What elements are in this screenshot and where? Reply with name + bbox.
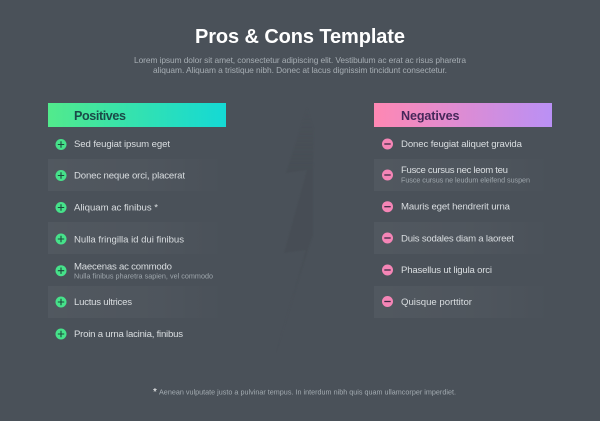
row: Fusce cursus (382, 165, 530, 184)
row: Phasellus: Phasellus ut ligula orci (401, 265, 492, 276)
row: Proin: Proin a urna lacinia, finibus (74, 329, 183, 340)
intro text: Lorem ipsum dolor sit amet, consectetur adipiscing elit. Vestibulum ac erat ac risus pharetra (134, 55, 466, 65)
panel: negatives (374, 103, 552, 318)
positives header: Positives (74, 109, 126, 123)
footnote: * (153, 387, 157, 398)
row: Aliquam: Aliquam ac finibus * (74, 202, 158, 214)
positive row bands (48, 159, 226, 318)
row: Quisque: Quisque porttitor (401, 297, 473, 308)
icon: lightning divider (274, 107, 314, 360)
row: Donec neque: Donec neque orci, placerat (74, 170, 185, 182)
row: Duis: Duis sodales diam a laoreet (401, 233, 514, 244)
panel: positives (48, 103, 226, 340)
row: Maecenas (56, 262, 213, 280)
negative row bands (374, 159, 552, 318)
row: Sed feugiat: Sed feugiat ipsum eget (74, 139, 170, 150)
footnote: Aenean vulputate justo a pulvinar tempus. In interdum nibh quis quam ullamcorper imperdiet. (159, 388, 456, 396)
row: Fusce cursus: Fusce cursus nec leom teu (401, 165, 508, 176)
title: Pros & Cons Template (195, 26, 405, 48)
negatives header: Negatives (401, 109, 460, 123)
row: Donec feugiat: Donec feugiat aliquet gravida (401, 139, 523, 150)
row: Maecenas: Nulla finibus pharetra sapien, vel commodo (74, 272, 213, 280)
row: Luctus: Luctus ultrices (74, 297, 132, 308)
row: Nulla fringilla: Nulla fringilla id dui finibus (74, 234, 184, 245)
negatives header (374, 103, 552, 127)
row: Mauris: Mauris eget hendrerit urna (401, 202, 511, 212)
positives header (48, 103, 226, 127)
row: Fusce cursus: Fusce cursus ne leudum eleifend suspen (401, 176, 530, 184)
intro text: aliquam. Aliquam a tristique nibh. Donec at lacus dignissim tincidunt consectetur. (153, 65, 447, 75)
intro text (134, 55, 466, 75)
row: Maecenas: Maecenas ac commodo (74, 262, 172, 272)
